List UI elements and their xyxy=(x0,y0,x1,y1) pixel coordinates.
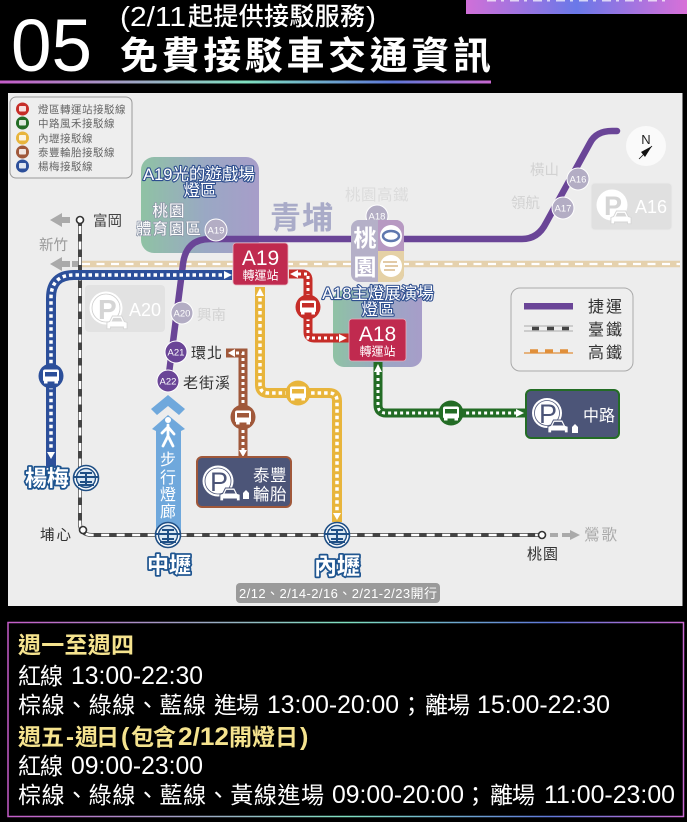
station: Zhongli xyxy=(147,522,191,578)
subtitle xyxy=(120,1,376,32)
parking: A20: A20 xyxy=(129,300,161,320)
label: Hengshan: 橫山 xyxy=(530,162,559,179)
schedule: other lines weekends xyxy=(18,781,675,809)
station: A22: 老街溪 xyxy=(183,375,231,392)
station: A21: 環北 xyxy=(191,345,223,362)
walking corridor: 行 xyxy=(160,469,176,487)
schedule: other lines weekends: 離場 xyxy=(490,782,535,808)
parking: Zhonglu: 中路 xyxy=(583,407,615,425)
parking: A20: P xyxy=(98,294,117,325)
heading: Monday to Thursday: 週一至週四 xyxy=(18,632,134,658)
transfer station: A19: A19 xyxy=(242,247,279,270)
route: Zhonglu green shuttle xyxy=(374,362,526,426)
station: Neili: 內壢 xyxy=(314,553,360,579)
station: Yangmei xyxy=(25,466,98,491)
legend: shuttle lines: 中路風禾接駁線 xyxy=(38,117,115,130)
station: A21 xyxy=(165,341,223,363)
legend: shuttle lines: 泰豐輪胎接駁線 xyxy=(38,146,115,159)
station: Zhongli: 中壢 xyxy=(147,553,191,578)
route: Taifeng brown shuttle xyxy=(226,349,256,458)
panel: A19 lantern zone: 桃園 xyxy=(152,202,186,220)
route: Yangmei blue shuttle xyxy=(38,271,232,468)
subtitle: 起提供接駁服務 xyxy=(188,3,365,31)
operating dates pill: 2/12、2/14-2/16、2/21-2/23開行 xyxy=(239,586,437,601)
label: Yingge: 鶯歌 xyxy=(584,526,619,544)
subtitle: ) xyxy=(366,1,376,32)
top-right banner fragment xyxy=(466,0,687,14)
legend: shuttle lines: 燈區轉運站接駁線 xyxy=(38,103,126,116)
station: Taoyuan HSR interchange block xyxy=(351,220,404,282)
schedule: other lines weekdays: 棕線、綠線、藍線 xyxy=(18,692,206,718)
parking: A16 xyxy=(591,183,672,230)
parking: Taifeng Tires: P xyxy=(210,467,228,497)
heading: Friday to Sunday: 週日 xyxy=(75,724,119,750)
station: A21: A21 xyxy=(168,348,184,358)
heading: Friday to Sunday: ( xyxy=(121,723,130,751)
A18 zone title: 燈區 xyxy=(362,300,394,319)
heading: Friday to Sunday: - xyxy=(66,724,74,751)
compass xyxy=(626,126,666,166)
heading: Friday to Sunday: 開燈日 xyxy=(229,724,298,750)
legend: line types: 高鐵 xyxy=(588,344,624,362)
parking: A16: P xyxy=(604,191,622,221)
walking corridor: 廊 xyxy=(160,503,176,521)
schedule: other lines weekdays: 進場 xyxy=(214,692,259,718)
schedule: red line weekdays: 13:00-22:30 xyxy=(71,662,203,690)
label: Linghang: 領航 xyxy=(511,195,540,212)
schedule: other lines weekdays: 15:00-22:30 xyxy=(477,691,610,719)
schedule: other lines weekends: ； xyxy=(464,782,487,808)
label: Taoyuan HSR: 桃園高鐵 xyxy=(345,186,409,204)
parking: Taifeng Tires xyxy=(197,457,291,507)
label: Hsinchu: 新竹 xyxy=(39,237,68,254)
panel: A19 lantern zone: A19光的遊戲場 xyxy=(143,165,255,184)
walking corridor: 步 xyxy=(160,451,176,469)
schedule: other lines weekdays xyxy=(18,691,610,719)
station: A22 xyxy=(157,370,231,392)
parking: Zhonglu xyxy=(526,390,619,438)
panel: shuttle schedule xyxy=(8,622,684,816)
transfer station: A18: A18 xyxy=(359,323,396,346)
parking: A16: A16 xyxy=(635,197,667,217)
title underline xyxy=(0,80,491,84)
panel: A19 lantern zone: 燈區 xyxy=(184,181,216,200)
schedule: other lines weekends: 棕線、綠線、藍線、黃線進場 xyxy=(18,782,324,808)
heading: Friday to Sunday xyxy=(18,723,308,751)
heading: Friday to Sunday: 週五 xyxy=(18,724,64,750)
station: Yangmei: 楊梅 xyxy=(25,466,69,491)
label: Fugang: 富岡 xyxy=(93,212,122,230)
legend: shuttle lines xyxy=(10,97,132,178)
schedule: other lines weekends: 11:00-23:00 xyxy=(544,781,675,809)
station: A19 gym: A19 xyxy=(208,226,224,236)
station: Neili xyxy=(314,522,360,579)
schedule: red line weekends: 紅線 xyxy=(18,753,63,779)
legend: shuttle lines: 內壢接駁線 xyxy=(38,132,93,145)
panel: route map xyxy=(8,93,682,606)
legend: line types xyxy=(511,288,633,371)
label: Taoyuan rail: 桃園 xyxy=(527,546,559,563)
walking corridor xyxy=(151,395,185,535)
parking: A20 xyxy=(85,285,165,332)
parking: Taifeng Tires: 輪胎 xyxy=(253,485,287,504)
title: 免費接駁車交通資訊 xyxy=(120,36,491,78)
heading: Friday to Sunday: 2/12 xyxy=(178,723,229,751)
section number: 05 xyxy=(11,4,92,87)
heading: Friday to Sunday: ) xyxy=(300,723,308,751)
subtitle: (2/11 xyxy=(120,1,186,32)
station: A17: A17 xyxy=(555,204,571,214)
station: Taoyuan HSR interchange block: 桃 xyxy=(354,225,376,251)
station: A20 xyxy=(171,302,226,324)
station: A17 xyxy=(552,197,574,219)
heading: Friday to Sunday: 包含 xyxy=(131,724,176,750)
transfer station: A18: 轉運站 xyxy=(359,344,396,358)
legend: shuttle lines: 楊梅接駁線 xyxy=(38,160,93,173)
schedule: red line weekends: 09:00-23:00 xyxy=(71,752,203,780)
station: A19 gym xyxy=(205,219,227,241)
compass: N xyxy=(641,132,651,147)
station: A22: A22 xyxy=(160,376,176,388)
legend: line types: 臺鐵 xyxy=(588,321,624,339)
panel: A19 lantern zone: 體育園區 xyxy=(136,219,202,238)
transfer station: A18 xyxy=(349,319,406,361)
schedule: other lines weekdays: 13:00-20:00 xyxy=(267,691,399,719)
route: Neili yellow shuttle xyxy=(256,287,341,522)
walking corridor: 燈 xyxy=(160,486,176,504)
station: A18: A18 xyxy=(369,212,385,222)
station: A16: A16 xyxy=(570,174,586,186)
station: Taoyuan HSR interchange block: 園 xyxy=(354,254,376,280)
parking: Zhonglu: P xyxy=(539,399,557,429)
legend: line types: 捷運 xyxy=(588,298,624,316)
panel: A19 lantern zone xyxy=(136,157,259,253)
schedule: red line weekdays: 紅線 xyxy=(18,663,63,689)
metro line xyxy=(168,131,617,381)
A18 zone title xyxy=(322,284,434,319)
transfer station: A19: 轉運站 xyxy=(242,268,279,282)
transfer station: A19 xyxy=(233,243,288,285)
A18 zone title: A18主燈展演場 xyxy=(322,284,434,303)
route: red transfer shuttle xyxy=(289,270,350,342)
schedule: other lines weekends: 09:00-20:00 xyxy=(332,781,464,809)
high speed rail line xyxy=(50,257,680,271)
panel: A18 lantern zone xyxy=(333,290,422,367)
schedule: other lines weekdays: 離場 xyxy=(425,692,470,718)
Taiwan rail line xyxy=(50,213,580,540)
station: A20: A20 xyxy=(174,308,190,320)
station: A16 xyxy=(567,168,589,190)
parking: Taifeng Tires: 泰豐 xyxy=(253,466,287,485)
station: A18 xyxy=(366,205,388,227)
label: Qingpu: 青埔 xyxy=(270,201,334,236)
label: Puxin: 埔心 xyxy=(40,527,73,544)
schedule: other lines weekdays: ； xyxy=(400,692,423,718)
station: A20: 興南 xyxy=(197,307,226,324)
